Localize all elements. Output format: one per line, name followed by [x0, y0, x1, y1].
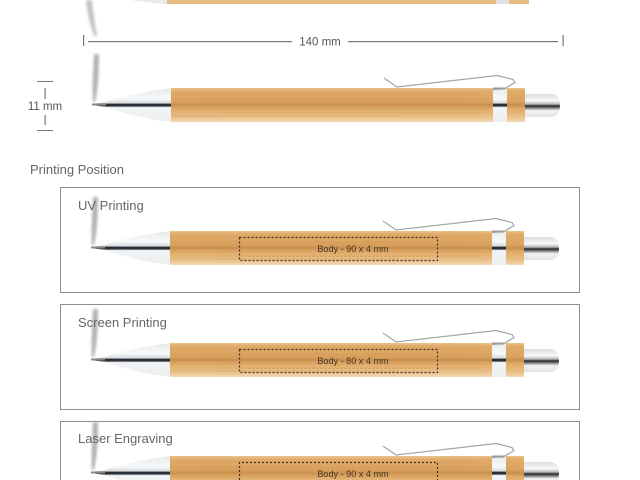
panel heading: UV Printing [78, 198, 144, 213]
print area [240, 350, 438, 372]
height label: 11 mm [28, 101, 62, 113]
panel: UV Printing [60, 188, 580, 292]
main pen [92, 54, 560, 122]
panel heading: Laser Engraving [78, 431, 173, 446]
print area [240, 238, 438, 260]
print area [240, 462, 438, 480]
print area: Body - 90 x 4 mm [317, 469, 389, 479]
heading: Printing Position: Printing Position [30, 162, 124, 177]
top pen (cropped) [86, 0, 529, 36]
dimension label: 140 mm [299, 36, 341, 48]
print area: Body - 80 x 4 mm [317, 356, 389, 366]
print area: Body - 90 x 4 mm [317, 244, 389, 254]
panel: Screen Printing [60, 304, 580, 410]
panel heading: Screen Printing [78, 315, 167, 330]
panel: Laser Engraving [60, 420, 580, 480]
dimension: 11 mm [28, 81, 62, 131]
